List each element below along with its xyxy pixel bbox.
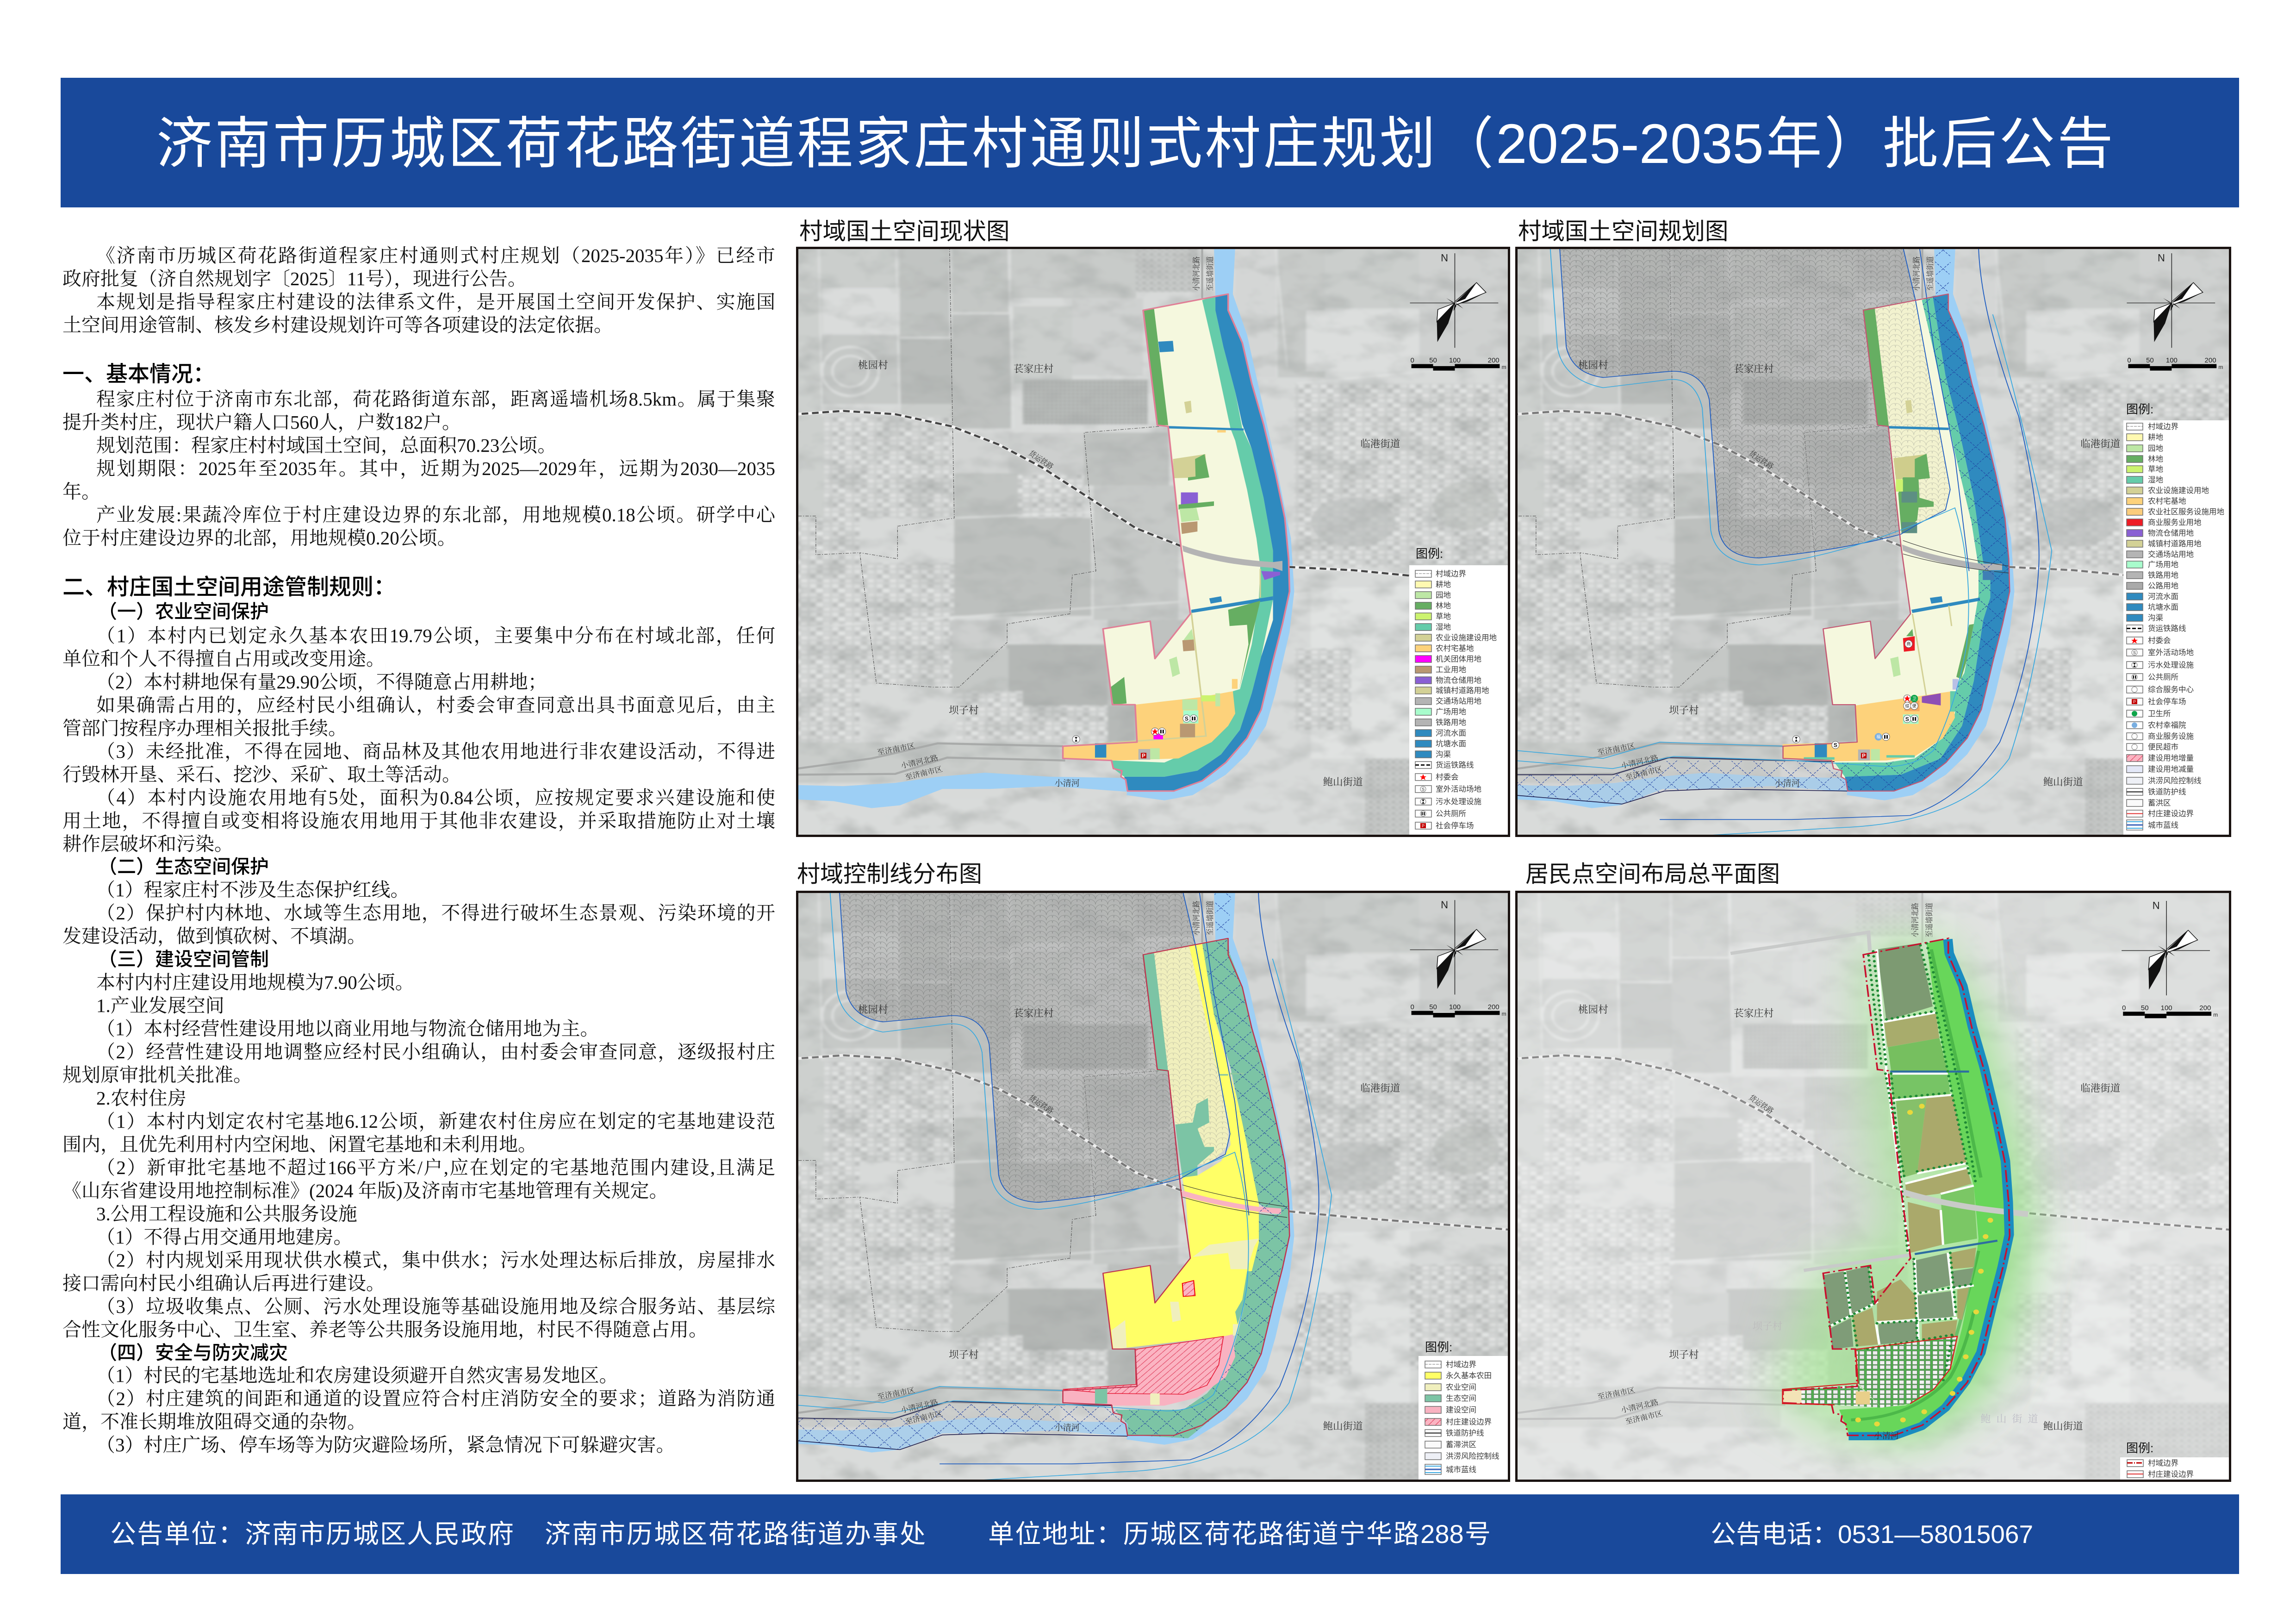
legend: current status map: 坑塘水面 <box>1436 739 1466 748</box>
header banner <box>61 78 2239 207</box>
legend: current status map: 污水处理设施 <box>1436 797 1481 806</box>
place labels: 苌家庄村 <box>1734 1008 1773 1019</box>
panel: settlement master plan <box>1515 891 2231 1482</box>
village boundary <box>1783 294 2010 791</box>
text block: safety and disaster prevention <box>62 1364 775 1456</box>
farmland within flood zone <box>1875 301 1950 534</box>
heading: current status map: 村域国土空间现状图 <box>799 218 1010 244</box>
place labels: 小清河 <box>1874 1431 1899 1441</box>
legend: current status map: 货运铁路线 <box>1436 761 1474 769</box>
place labels: 至遥墙街道 <box>1206 900 1214 935</box>
heading: control lines map: 村域控制线分布图 <box>797 861 982 887</box>
village boundary <box>1063 938 1289 1436</box>
legend: land use plan map: 室外活动场地 <box>2148 648 2194 657</box>
place labels: 鲍山街道 <box>2043 1421 2083 1432</box>
legend: land use plan map: 农村幸福院 <box>2148 721 2186 730</box>
village construction boundary <box>1783 1337 1957 1405</box>
legend: land use plan map: 商业服务设施 <box>2148 732 2194 741</box>
compass and scale bar: 100 <box>1449 356 1461 364</box>
place labels: 小清河 <box>1775 779 1800 788</box>
footer banner <box>61 1494 2239 1574</box>
text block: construction control: 规划原审批机关批准。 <box>62 1064 252 1086</box>
facility icons <box>1792 640 1918 759</box>
text block: announcement intro: 土空间用途管制、核发乡村建设规划许可等各项建设的法定依据。 <box>62 314 613 336</box>
panel: land use plan map <box>1515 247 2231 837</box>
place labels: 小清河北路 <box>1192 256 1201 291</box>
text block: construction control: （1）不得占用交通用地建房。 <box>96 1226 353 1248</box>
legend: current status map: 工业用地 <box>1436 665 1466 674</box>
text block: safety and disaster prevention: （2）村庄建筑的间距和通道的设置应符合村庄消防安全的要求；道路为消防通 <box>96 1388 775 1409</box>
agricultural space <box>1112 945 1259 1349</box>
place labels: 鲍山街道 <box>1323 776 1363 787</box>
legend: settlement master plan: 图例: <box>2126 1441 2153 1455</box>
land use: wetland <box>1112 296 1273 777</box>
compass and scale bar: 50 <box>2141 1004 2149 1012</box>
place labels: 桃园村 <box>858 1004 888 1015</box>
compass and scale bar <box>1410 252 1506 371</box>
place labels <box>858 256 1400 788</box>
place labels: 至济南市区 <box>877 742 916 757</box>
text block: agricultural protection: 如果确需占用的，应经村民小组确认，村委会审查同意出具书面意见后，由主 <box>96 694 775 716</box>
facility icons: S <box>1185 716 1188 722</box>
flood storage zone <box>840 892 1195 1202</box>
legend: land use plan map: 城市蓝线 <box>2148 821 2178 830</box>
railway <box>791 1056 1509 1230</box>
heading: land use plan map: 村域国土空间规划图 <box>1518 218 1728 244</box>
legend: current status map: 机关团体用地 <box>1436 655 1481 663</box>
legend: current status map: 农村宅基地 <box>1436 644 1474 653</box>
place labels: 小清河北路 <box>1620 1398 1659 1414</box>
legend: current status map: 交通场站用地 <box>1436 697 1481 706</box>
legend: control lines map: 建设空间 <box>1446 1405 1476 1414</box>
text block: agricultural protection: 单位和个人不得擅自占用或改变用途。 <box>62 648 385 669</box>
footer: telephone: 公告电话：0531—58015067 <box>1711 1520 2033 1549</box>
place labels: 货运铁路 <box>1027 1093 1055 1115</box>
river channel <box>1848 939 2009 1436</box>
legend: land use plan map: 物流仓储用地 <box>2148 529 2194 537</box>
legend: current status map: 村委会 <box>1436 773 1459 781</box>
text block: ecological protection: （1）程家庄村不涉及生态保护红线。 <box>96 879 409 900</box>
text block: construction control: （2）新审批宅基地不超过166平方米/户,应在划定的宅基地范围内建设,且满足 <box>96 1157 775 1178</box>
text block: agricultural protection <box>62 624 775 856</box>
yellow flowering trees <box>1855 1104 1993 1426</box>
text block: construction control: 围内，且优先利用村内空闲地、闲置宅基地和未利用地。 <box>62 1134 537 1155</box>
place labels: 临港街道 <box>2080 438 2120 450</box>
legend: land use plan map: 图例: <box>2126 402 2153 416</box>
footer: publishing organisation 1: 公告单位：济南市历城区人民政府 <box>110 1519 514 1549</box>
text block: construction control: 2.农村住房 <box>96 1087 187 1109</box>
text block: construction control: （3）垃圾收集点、公厕、污水处理设施等基础设施用地及综合服务站、基层综 <box>96 1296 775 1317</box>
legend: control lines map: 铁道防护线 <box>1446 1429 1484 1437</box>
legend: land use plan map: 农业社区服务设施用地 <box>2148 507 2224 516</box>
legend: current status map: 铁路用地 <box>1436 718 1466 727</box>
place labels: 小清河北路 <box>1192 900 1201 935</box>
place labels: 坝子村 <box>949 1349 978 1360</box>
legend: current status map: 广场用地 <box>1436 707 1466 716</box>
text block: construction control: 3.公用工程设施和公共服务设施 <box>96 1203 357 1224</box>
farmland fields <box>1823 943 1977 1349</box>
facility icons: P <box>1142 753 1145 759</box>
legend: land use plan map: P <box>2133 700 2136 704</box>
legend: control lines map: 永久基本农田 <box>1446 1371 1492 1380</box>
text block: agricultural protection: （2）本村耕地保有量29.90公顷，不得随意占用耕地； <box>96 671 547 693</box>
text block: agricultural protection: 耕作层破坏和污染。 <box>62 833 233 855</box>
compass and scale bar <box>2122 900 2218 1018</box>
legend: land use plan map: 林地 <box>2148 455 2163 463</box>
text block: basic situation: 程家庄村位于济南市东北部，荷花路街道东部，距离遥墙机场8.5km。属于集聚 <box>96 388 775 410</box>
place labels: 苌家庄村 <box>1014 363 1053 375</box>
legend: current status map: 草地 <box>1436 612 1451 621</box>
railway <box>1512 411 2133 576</box>
village boundary <box>1063 294 1289 791</box>
land use: wetland <box>1835 296 1991 777</box>
text block: construction control: （1）本村经营性建设用地以商业用地与物流仓储用地为主。 <box>96 1018 599 1039</box>
detail patches <box>1095 1074 1287 1405</box>
place labels: 至济南市区 <box>904 1410 944 1426</box>
legend: current status map: 图例: <box>1416 547 1443 561</box>
text block: agricultural protection: （1）本村内已划定永久基本农田19.79公顷，主要集中分布在村域北部，任何 <box>96 625 775 646</box>
text block: announcement intro: 本规划是指导程家庄村建设的法律系文件，是开展国土空间开发保护、实施国 <box>96 291 775 312</box>
legend: control lines map: 城市蓝线 <box>1446 1465 1476 1474</box>
subheading: safety and disaster prevention: （四）安全与防灾减灾 <box>98 1342 288 1363</box>
place labels: 货运铁路 <box>1027 449 1055 471</box>
legend: land use plan map: 便民超市 <box>2148 743 2178 751</box>
ecological space <box>1115 938 1289 1438</box>
place labels: 货运铁路 <box>1747 1093 1775 1115</box>
legend: land use plan map: 铁道防护线 <box>2148 787 2186 796</box>
flood storage zone <box>1560 247 1916 558</box>
text block: construction control: （2）经营性建设用地调整应经村民小组确认，由村委会审查同意，逐级报村庄 <box>96 1041 775 1062</box>
compass and scale bar: N <box>2153 900 2160 912</box>
place labels: 小清河北路 <box>900 1398 939 1414</box>
legend: current status map: S <box>1422 787 1425 792</box>
heading: settlement master plan: 居民点空间布局总平面图 <box>1525 861 1780 887</box>
legend: land use plan map: 草地 <box>2148 465 2163 474</box>
compass and scale bar: 0 <box>1410 356 1414 364</box>
permanent basic farmland <box>1103 943 1259 1349</box>
legend: land use plan map: 建设用地减量 <box>2148 765 2194 774</box>
legend: land use plan map: 货运铁路线 <box>2148 624 2186 633</box>
riparian green belt <box>1839 939 2004 1433</box>
legend: current status map: 林地 <box>1436 601 1451 610</box>
place labels: 桃园村 <box>858 360 888 371</box>
legend: control lines map: 图例: <box>1425 1340 1452 1354</box>
compass and scale bar: 100 <box>1449 1003 1461 1011</box>
compass and scale bar: 100 <box>2161 1004 2172 1012</box>
flood risk control hatching <box>1513 247 2010 804</box>
legend: current status map: 城镇村道路用地 <box>1436 686 1489 695</box>
legend: land use plan map: 公路用地 <box>2148 581 2178 590</box>
legend: land use plan map: 园地 <box>2148 444 2163 453</box>
text block: safety and disaster prevention: （3）村庄广场、停车场等为防灾避险场所，紧急情况下可躲避灾害。 <box>96 1434 675 1455</box>
legend: land use plan map: S <box>2133 650 2136 655</box>
legend: land use plan map: 农业设施建设用地 <box>2148 486 2209 495</box>
village construction boundary <box>1063 1337 1223 1394</box>
panel: current status map <box>796 247 1510 837</box>
legend: current status map: 耕地 <box>1436 580 1451 589</box>
compass and scale bar: 100 <box>2166 356 2178 364</box>
place labels: 坝子村 <box>949 705 978 716</box>
place labels <box>1578 256 2120 788</box>
legend: current status map: 湿地 <box>1436 623 1451 631</box>
legend: control lines map <box>1419 1340 1510 1482</box>
legend: land use plan map: 铁路用地 <box>2148 571 2178 580</box>
text block: announcement intro: 政府批复（济自然规划字〔2025〕11号），现进行公告。 <box>62 268 527 289</box>
place labels: 鲍山街道 <box>1980 1413 2043 1424</box>
tree rows <box>1830 943 1976 1381</box>
text block: construction control: 本村内村庄建设用地规模为7.90公顷。 <box>96 972 414 993</box>
legend: current status map: 园地 <box>1436 591 1451 600</box>
place labels: 坝子村 <box>1669 705 1699 716</box>
legend: land use plan map: 村委会 <box>2148 636 2171 645</box>
legend: land use plan map: 社会停车场 <box>2148 697 2186 706</box>
land use: rural homestead <box>1783 691 1955 761</box>
place labels: 坝子村 <box>1669 1349 1699 1360</box>
land use: farmland <box>1063 294 1289 791</box>
facility icons: 卫 <box>1912 696 1916 701</box>
legend: current status map: 物流仓储用地 <box>1436 676 1481 685</box>
place labels: 鲍山街道 <box>2043 776 2083 787</box>
heading: basic situation: 一、基本情况： <box>62 362 215 386</box>
text block: agricultural protection: 行毁林开垦、采石、挖沙、采矿、取土等活动。 <box>62 764 461 785</box>
compass and scale bar: 200 <box>2205 356 2216 364</box>
legend: land use plan map: 城镇村道路用地 <box>2148 539 2201 548</box>
legend: land use plan map: 广场用地 <box>2148 560 2178 569</box>
legend: land use plan map: 村域边界 <box>2148 422 2178 431</box>
text block: construction control: （2）村内规划采用现状供水模式，集中供水；污水处理达标后排放，房屋排水 <box>96 1249 775 1271</box>
land use: details <box>1804 307 2009 761</box>
legend: current status map: 村域边界 <box>1436 569 1466 578</box>
facility icons: 便 <box>1912 703 1916 708</box>
legend: land use plan map: 耕地 <box>2148 433 2163 442</box>
place labels: 苌家庄村 <box>1734 363 1773 375</box>
legend: control lines map: 蓄滞洪区 <box>1446 1440 1476 1449</box>
legend: control lines map: 洪涝风险控制线 <box>1446 1452 1500 1461</box>
construction space <box>1063 1334 1235 1405</box>
blue lines <box>1513 247 2052 838</box>
place labels: 至济南市区 <box>877 1386 916 1401</box>
legend: current status map: 社会停车场 <box>1436 821 1474 830</box>
land use: farmland <box>1783 294 2010 791</box>
facility icons: 商 <box>1907 641 1911 646</box>
place labels: 小清河 <box>1055 779 1080 788</box>
place labels: 临港街道 <box>1360 438 1400 450</box>
legend: current status map: 农业设施建设用地 <box>1436 633 1497 642</box>
compass and scale bar: 200 <box>1488 1003 1500 1011</box>
legend: current status map: 沟渠 <box>1436 750 1451 759</box>
text block: ecological protection: 发建设活动，做到慎砍树、不填湖。 <box>62 925 366 947</box>
compass and scale bar: 50 <box>1429 356 1437 364</box>
facility icons: S <box>1834 742 1837 749</box>
facility icons: S <box>1905 716 1909 722</box>
text block: basic situation <box>62 387 775 550</box>
text block: basic situation: 提升类村庄，现状户籍人口560人，户数182户。 <box>62 412 461 433</box>
legend: land use plan map: 农村宅基地 <box>2148 497 2186 506</box>
text block: announcement intro: 《济南市历城区荷花路街道程家庄村通则式村庄规划（2025-2035年）》已经市 <box>96 245 775 266</box>
legend: control lines map: 农业空间 <box>1446 1383 1476 1392</box>
legend: land use plan map: 污水处理设施 <box>2148 661 2194 669</box>
place labels: 桃园村 <box>1578 1004 1608 1015</box>
text block: safety and disaster prevention: 道，不准长期堆放阻碍交通的杂物。 <box>62 1411 366 1432</box>
compass and scale bar <box>1410 899 1506 1018</box>
compass and scale bar: m <box>2218 364 2223 370</box>
text block: agricultural protection: （3）未经批准，不得在园地、商品林及其他农用地进行非农建设活动，不得进 <box>96 741 775 762</box>
legend: land use plan map: 村庄建设边界 <box>2148 809 2194 818</box>
place labels: 小清河北路 <box>1620 754 1659 770</box>
place labels: 至济南市区 <box>904 765 944 781</box>
place labels: 临港街道 <box>2080 1083 2120 1094</box>
railway <box>1512 1056 2229 1230</box>
legend: settlement master plan: 村庄建设边界 <box>2148 1470 2194 1479</box>
text block: announcement intro <box>62 244 775 337</box>
heading: land use rules: 二、村庄国土空间用途管制规则： <box>62 575 396 600</box>
legend: land use plan map: 沟渠 <box>2148 613 2163 622</box>
facility icons: 福 <box>1876 734 1880 739</box>
riparian inner strips <box>1851 949 1981 1420</box>
place labels: 临港街道 <box>1360 1083 1400 1094</box>
legend: land use plan map: 建设用地增量 <box>2148 754 2194 762</box>
compass and scale bar: N <box>1441 252 1448 264</box>
footer: publishing organisation 2: 济南市历城区荷花路街道办事处 <box>545 1519 926 1549</box>
compass and scale bar: 0 <box>2122 1004 2126 1012</box>
legend: control lines map: 生态空间 <box>1446 1394 1476 1403</box>
compass and scale bar: 200 <box>1488 356 1500 364</box>
compass and scale bar: m <box>1502 364 1506 370</box>
place labels: 坝子村 <box>1753 1321 1782 1332</box>
legend: settlement master plan <box>2120 1441 2231 1482</box>
legend: land use plan map: 河流水面 <box>2148 592 2178 601</box>
footer: address: 单位地址：历城区荷花路街道宁华路288号 <box>988 1519 1491 1549</box>
text block: construction control: （1）本村内划定农村宅基地6.12公顷，新建农村住房应在划定的宅基地建设范 <box>96 1111 775 1132</box>
text block: basic situation: 产业发展:果蔬冷库位于村庄建设边界的东北部，用地规模0.18公顷。研学中心 <box>96 504 775 525</box>
place labels: 桃园村 <box>1578 360 1608 371</box>
legend: land use plan map: 交通场站用地 <box>2148 550 2194 559</box>
place labels: 至济南市区 <box>1624 1410 1664 1426</box>
legend: current status map: 室外活动场地 <box>1436 785 1481 793</box>
place labels: 苌家庄村 <box>1014 1008 1053 1019</box>
compass and scale bar: m <box>1502 1011 1506 1017</box>
text block: agricultural protection: 管部门按程序办理相关报批手续。 <box>62 718 347 739</box>
text block: basic situation: 位于村庄建设边界的北部，用地规模0.20公顷。 <box>62 527 456 549</box>
village buildings <box>1856 1337 1957 1408</box>
legend: land use plan map: 卫生所 <box>2148 709 2171 718</box>
compass and scale bar: 0 <box>1410 1003 1414 1011</box>
text block: agricultural protection: 用土地，不得擅自或变相将设施农用地用于其他非农建设，并采取措施防止对土壤 <box>62 810 775 831</box>
legend: land use plan map: 洪涝风险控制线 <box>2148 776 2201 785</box>
text block: ecological protection <box>62 878 775 948</box>
land use: river surface <box>1124 294 1289 791</box>
facility icons <box>1072 715 1197 759</box>
place labels: 至济南市区 <box>1624 765 1664 781</box>
legend: settlement master plan: 村域边界 <box>2148 1459 2178 1468</box>
text block: safety and disaster prevention: （1）村民的宅基地选址和农房建设须避开自然灾害易发地区。 <box>96 1365 618 1386</box>
subheading: agricultural protection: （一）农业空间保护 <box>98 601 269 622</box>
place labels: 小清河北路 <box>900 754 939 770</box>
text block: construction control: 1.产业发展空间 <box>96 995 224 1016</box>
place labels: 至济南市区 <box>1597 742 1636 757</box>
legend: control lines map: 村域边界 <box>1446 1360 1476 1369</box>
place labels: 小清河北路 <box>1911 903 1920 937</box>
title: 济南市历城区荷花路街道程家庄村通则式村庄规划（2025-2035年）批后公告 <box>156 112 2113 175</box>
legend: current status map <box>1409 547 1510 837</box>
subheading: construction control: （三）建设空间管制 <box>98 949 269 970</box>
place labels <box>1578 903 2120 1441</box>
place labels: 小清河 <box>1055 1423 1080 1432</box>
place labels: 鲍山街道 <box>1323 1421 1363 1432</box>
place labels: 货运铁路 <box>1747 449 1775 471</box>
place labels: 至遥墙街道 <box>1925 903 1934 937</box>
outer approach roads <box>1730 932 1910 1270</box>
text block: construction control: 合性文化服务中心、卫生室、养老等公共服务设施用地，村民不得随意占用。 <box>62 1319 708 1340</box>
white field roads <box>1830 949 1974 1344</box>
railway bridge <box>1902 1192 2028 1214</box>
compass and scale bar: N <box>1441 899 1448 911</box>
compass and scale bar: 50 <box>1429 1003 1437 1011</box>
text block: basic situation: 规划期限：2025年至2035年。其中，近期为2025—2029年，远期为2030—2035 <box>96 458 775 479</box>
facility icons: 综 <box>1905 703 1909 708</box>
land use: details <box>1065 308 1282 760</box>
text block: basic situation: 规划范围：程家庄村村域国土空间，总面积70.23公顷。 <box>96 435 556 456</box>
flood risk control hatching <box>791 891 1289 1449</box>
blue lines <box>793 892 1332 1482</box>
legend: land use plan map: 公共厕所 <box>2148 673 2178 681</box>
legend: land use plan map: 综合服务中心 <box>2148 685 2194 694</box>
compass and scale bar: N <box>2158 252 2165 264</box>
legend: land use plan map: 商业服务业用地 <box>2148 518 2201 527</box>
compass and scale bar: 200 <box>2199 1004 2211 1012</box>
place labels: 小清河北路 <box>1912 256 1921 291</box>
legend: land use plan map: 湿地 <box>2148 475 2163 484</box>
text block: construction control: 接口需向村民小组确认后再进行建设。 <box>62 1273 385 1294</box>
legend: current status map: 河流水面 <box>1436 729 1466 737</box>
place labels: 至遥墙街道 <box>1926 256 1935 291</box>
text block: basic situation: 年。 <box>62 481 100 502</box>
land use: rural homestead <box>1063 691 1235 761</box>
panel: control lines map <box>796 891 1510 1482</box>
place labels: 至济南市区 <box>1597 1386 1636 1401</box>
canals <box>1890 1072 1997 1254</box>
text block: ecological protection: （2）保护村内林地、水域等生态用地，不得进行破坏生态景观、污染环境的开 <box>96 902 775 924</box>
village boundary dashed <box>1783 938 2010 1436</box>
legend: current status map: 公共厕所 <box>1436 809 1466 818</box>
text block: agricultural protection: （4）本村内设施农用地有5处，面积为0.84公顷，应按规定要求兴建设施和使 <box>96 787 775 808</box>
place labels <box>858 900 1400 1432</box>
subheading: ecological protection: （二）生态空间保护 <box>98 856 269 877</box>
facility icons: P <box>1862 753 1866 759</box>
compass and scale bar: m <box>2213 1012 2218 1018</box>
legend: land use plan map: 坑塘水面 <box>2148 603 2178 612</box>
green landscape glow <box>1773 933 2033 1446</box>
text block: construction control: 《山东省建设用地控制标准》(2024 年版)及济南市宅基地管理有关规定。 <box>62 1180 668 1201</box>
west building strip <box>1783 1385 1882 1408</box>
legend: land use plan map: 蓄洪区 <box>2148 799 2171 807</box>
compass and scale bar <box>2127 252 2223 371</box>
compass and scale bar: 0 <box>2127 356 2131 364</box>
text block: construction control <box>62 971 775 1341</box>
legend: current status map: P <box>1422 824 1425 828</box>
land use: river surface <box>1845 294 2010 791</box>
legend: land use plan map <box>2123 402 2231 837</box>
compass and scale bar: 50 <box>2146 356 2154 364</box>
place labels: 至遥墙街道 <box>1206 256 1214 291</box>
legend: control lines map: 村庄建设边界 <box>1446 1418 1492 1426</box>
railway <box>791 411 1412 576</box>
